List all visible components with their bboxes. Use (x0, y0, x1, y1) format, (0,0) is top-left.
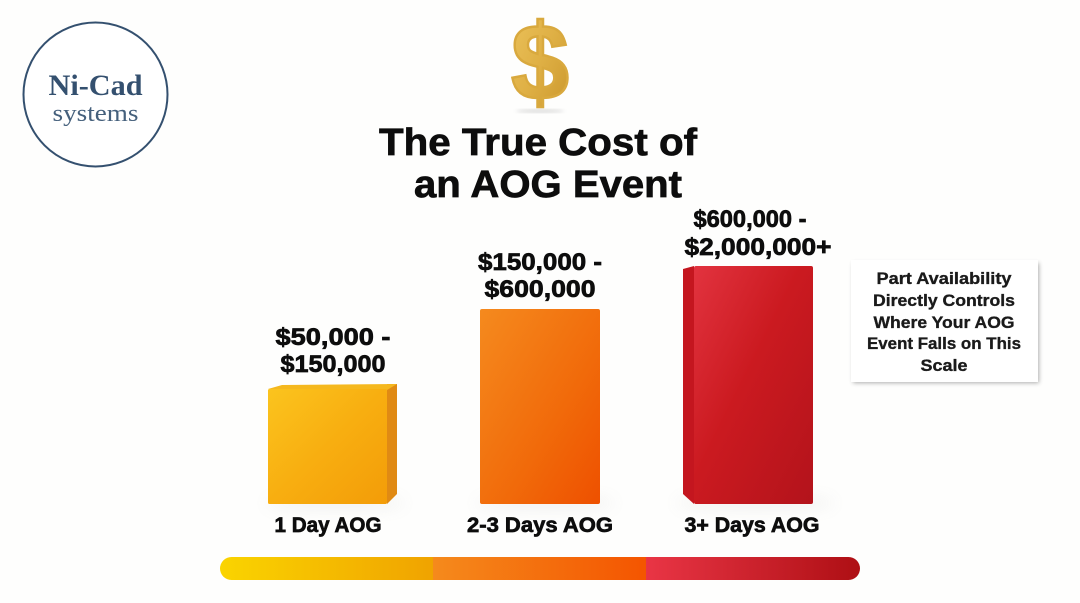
callout: part availability: Part Availability (876, 269, 1012, 288)
title (379, 122, 697, 206)
logo: Ni-Cad systems (24, 22, 168, 166)
logo: Ni-Cad systems: Ni-Cad (48, 69, 143, 102)
value label: 2-3 days: $150,000 - (478, 249, 602, 276)
axis label: 2-3 days AOG: 2-3 Days AOG (467, 514, 613, 537)
value label: 3+ days: $2,000,000+ (684, 234, 832, 261)
value label: 3+ days (684, 206, 832, 261)
callout: part availability: Directly Controls (873, 291, 1015, 310)
logo: Ni-Cad systems: systems (52, 101, 138, 127)
callout: part availability (851, 260, 1039, 383)
value label: 2-3 days: $600,000 (484, 276, 596, 303)
bar: 3+ days AOG (675, 266, 835, 507)
bar: 1 day AOG (265, 384, 405, 507)
callout: part availability: Event Falls on This (867, 334, 1021, 353)
callout: part availability: Where Your AOG (874, 313, 1014, 332)
axis label: 1 day AOG: 1 Day AOG (274, 514, 382, 537)
value label: 1 day: $50,000 - (276, 324, 390, 351)
axis label: 3+ days AOG: 3+ Days AOG (684, 514, 820, 537)
value label: 1 day (276, 324, 390, 378)
title: The True Cost of (379, 122, 697, 164)
value label: 1 day: $150,000 (280, 351, 386, 378)
callout: part availability: Scale (920, 356, 968, 375)
value label: 2-3 days (478, 249, 602, 303)
severity gradient bar (220, 557, 860, 580)
title: an AOG Event (414, 164, 682, 206)
bar: 2-3 days AOG (475, 309, 615, 507)
icon: gold dollar sign: $ (511, 1, 569, 122)
value label: 3+ days: $600,000 - (694, 206, 807, 233)
